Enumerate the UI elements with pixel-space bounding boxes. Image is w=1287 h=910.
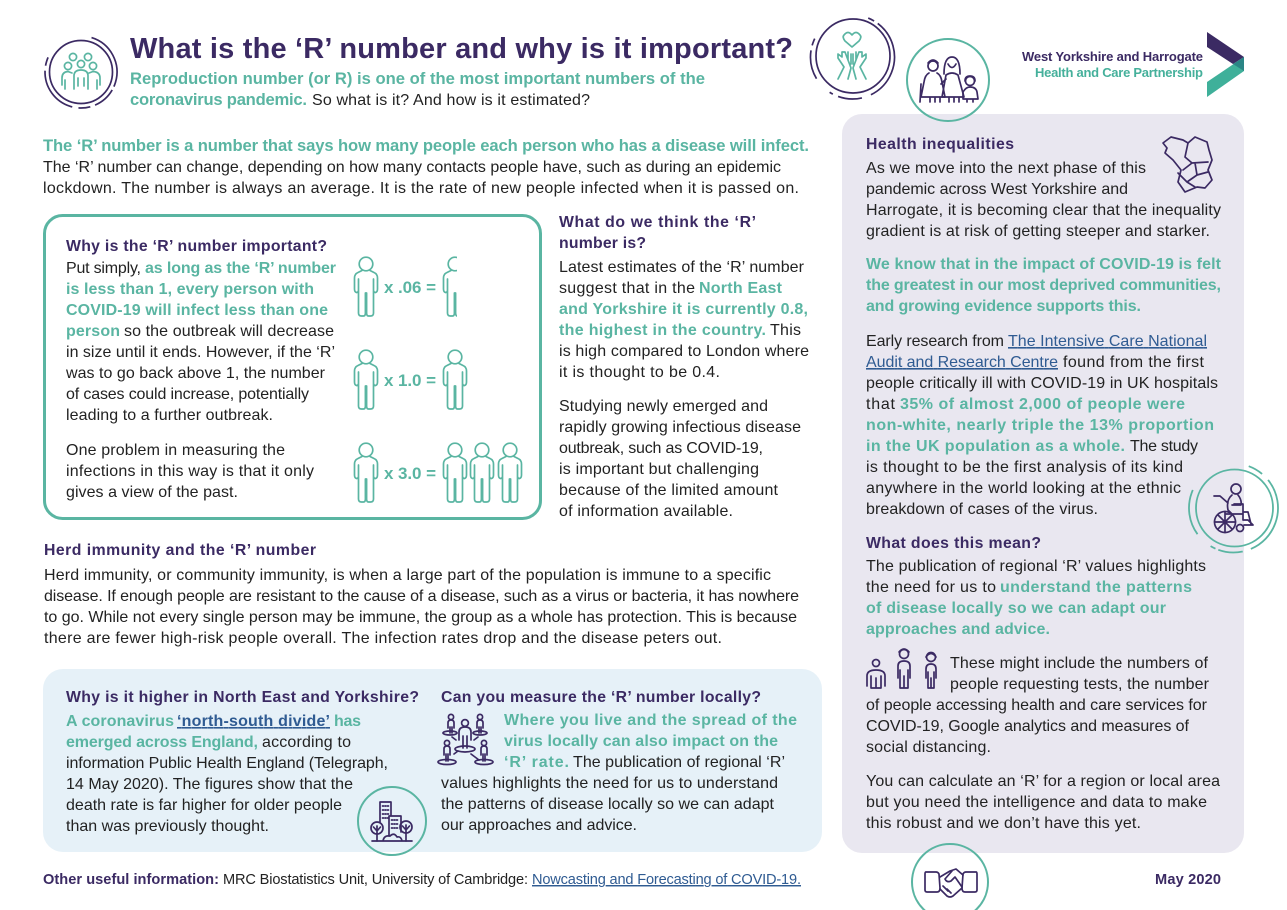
logo: West Yorkshire and Harrogate — [1022, 49, 1203, 64]
diagram: R 1.0 — [354, 350, 466, 409]
panel: health inequalities background — [842, 114, 1244, 853]
text block: can you measure the R number locally: the patterns of disease locally so we can adapt — [441, 796, 775, 813]
text block: why is it higher in north east and yorkshire: information Public Health England (Telegraph, — [66, 755, 388, 772]
text block: can you measure the R number locally: Can you measure the ‘R’ number locally? — [441, 689, 761, 706]
text block: herd immunity: Herd immunity and the ‘R’ number — [44, 542, 316, 559]
text block: what do we think the R number is: suggest that in the — [559, 280, 695, 297]
text block: why is it higher in north east and yorkshire: Why is it higher in North East and Yorkshire? — [66, 689, 419, 706]
text: measuring problem: One problem in measuring the — [66, 442, 285, 459]
intro text — [43, 136, 809, 197]
intro text: The ‘R’ number is a number that says how many people each person who has a disease will infect. — [43, 136, 809, 155]
text block: what do we think the R number is: North East — [699, 280, 783, 297]
intro text: The ‘R’ number can change, depending on how many contacts people have, such as during an epidemic — [43, 159, 781, 176]
text: measuring problem: infections in this way is that it only — [66, 463, 314, 480]
icon: wheelchair user in double ring — [1176, 451, 1287, 565]
icon: city in teal circle — [358, 787, 426, 855]
diagram: R 1.0: x 1.0 = — [384, 371, 436, 390]
text block: can you measure the R number locally: values highlights the need for us to understand — [441, 775, 778, 792]
text block: what do we think the R number is: is high compared to London where — [559, 343, 809, 360]
text block: why is it higher in north east and yorkshire: 14 May 2020). The figures show that the — [66, 776, 353, 793]
diagram: R 0.06 — [354, 257, 466, 316]
icon: people spread on network — [438, 714, 493, 764]
text block: can you measure the R number locally: ‘R’ rate. — [504, 754, 569, 771]
callout: deprived communities: We know that in the impact of COVID-19 is felt — [866, 256, 1222, 273]
diagram: R 3.0: x 3.0 = — [384, 464, 436, 483]
text block: what does this mean: The publication of regional ‘R’ values highlights — [866, 558, 1206, 575]
diagram: R 3.0 — [354, 443, 522, 502]
text block: why is it higher in north east and yorkshire: emerged across England, — [66, 734, 258, 751]
text: explanation: as long as the ‘R’ number — [145, 260, 336, 277]
text block: these might include: people requesting tests, the number — [950, 676, 1210, 693]
text block: calculate an R: this robust and we don’t have this yet. — [866, 815, 1141, 832]
footer: useful information: Other useful information: — [43, 872, 219, 888]
heading: why important: Why is the ‘R’ number important? — [66, 238, 327, 255]
icon: three people — [867, 649, 936, 688]
text: explanation: COVID-19 will infect less than one — [66, 302, 328, 319]
text: explanation — [65, 260, 336, 424]
text block: can you measure the R number locally: Where you live and the spread of the — [504, 712, 797, 729]
icon: map of west yorkshire and harrogate — [1163, 137, 1212, 192]
text block: early research: breakdown of cases of the virus. — [866, 501, 1098, 518]
footer: useful information — [43, 872, 801, 888]
text block: what does this mean: the need for us to — [866, 579, 996, 596]
text: measuring problem: gives a view of the past. — [66, 484, 238, 501]
text block: herd immunity: disease. If enough people are resistant to the cause of a disease, such as a virus or bacteria, it has nowhere — [44, 588, 799, 605]
text block: health inequalities: pandemic across West Yorkshire and — [866, 181, 1128, 198]
footer: useful information: Nowcasting and Forecasting of COVID-19. — [532, 872, 801, 888]
text block: these might include: These might include the numbers of — [950, 655, 1209, 672]
text block: what do we think the R number is: This — [770, 322, 801, 339]
text: explanation: is less than 1, every person with — [66, 281, 314, 298]
logo: Health and Care Partnership — [1035, 65, 1203, 80]
icon: hands holding heart in double ring — [798, 2, 907, 112]
text block: what do we think the R number is: it is thought to be 0.4. — [559, 364, 720, 381]
text: explanation: so the outbreak will decrease — [124, 323, 334, 340]
title: What is the ‘R’ number and why is it important? — [130, 33, 793, 65]
text block: what does this mean: What does this mean? — [866, 535, 1041, 552]
text block: why is it higher in north east and yorkshire: A coronavirus — [66, 713, 174, 730]
text block: calculate an R: but you need the intelligence and data to make — [866, 794, 1207, 811]
text block: what do we think the R number is: What do we think the ‘R’ — [559, 214, 756, 231]
text block: early research: The study — [1130, 438, 1198, 455]
text block: early research: Early research from — [866, 333, 1004, 350]
text block: these might include — [866, 655, 1210, 756]
callout: deprived communities: and growing evidence supports this. — [866, 298, 1141, 315]
text block: what do we think the R number is — [559, 214, 809, 381]
text block: studying outbreaks: Studying newly emerged and — [559, 398, 768, 415]
text block: what do we think the R number is: the highest in the country. — [559, 322, 766, 339]
text block: health inequalities — [866, 136, 1221, 240]
text block: studying outbreaks — [559, 398, 801, 520]
icon: handshake in teal circle — [912, 844, 988, 910]
text: explanation: person — [66, 323, 120, 340]
text block: early research: found from the first — [1063, 354, 1205, 371]
panel: north east and local measure background — [43, 669, 822, 852]
text block: early research: 35% of almost 2,000 of people were — [900, 396, 1185, 413]
text block: what do we think the R number is: number is? — [559, 235, 646, 252]
text block: studying outbreaks: outbreak, such as COVID-19, — [559, 440, 763, 457]
text block: why is it higher in north east and yorkshire: according to — [262, 734, 351, 751]
text block: early research: is thought to be the first analysis of its kind — [866, 459, 1183, 476]
text block: early research: people critically ill with COVID-19 in UK hospitals — [866, 375, 1218, 392]
text block: early research: The Intensive Care National — [1008, 333, 1207, 350]
text block: can you measure the R number locally — [441, 689, 797, 834]
text block: health inequalities: Harrogate, it is becoming clear that the inequality — [866, 202, 1221, 219]
text block: these might include: COVID-19, Google analytics and measures of — [866, 718, 1190, 735]
subtitle: Reproduction number (or R) is one of the most important numbers of the — [130, 69, 705, 88]
text: explanation: of cases could increase, potentially — [66, 386, 309, 403]
footer: date: May 2020 — [1155, 872, 1221, 888]
text block: studying outbreaks: because of the limited amount — [559, 482, 779, 499]
diagram: R 0.06: x .06 = — [384, 278, 436, 297]
text block: why is it higher in north east and yorkshire: death rate is far higher for older people — [66, 797, 342, 814]
icon: family in teal circle — [907, 39, 989, 121]
text block: herd immunity: to go. While not every single person may be immune, the group as a whole has protection. This is because — [44, 609, 797, 626]
text block: studying outbreaks: rapidly growing infectious disease — [559, 419, 801, 436]
text block: what does this mean: of disease locally so we can adapt our — [866, 600, 1166, 617]
text block: herd immunity: there are fewer high-risk people overall. The infection rates drop and the disease peters out. — [44, 630, 722, 647]
text block: what do we think the R number is: Latest estimates of the ‘R’ number — [559, 259, 805, 276]
text block: why is it higher in north east and yorkshire — [66, 689, 419, 835]
text: explanation: was to go back above 1, the number — [65, 365, 326, 382]
text: explanation: in size until it ends. However, if the ‘R’ — [66, 344, 335, 361]
text block: studying outbreaks: of information available. — [559, 503, 733, 520]
subtitle — [130, 69, 705, 109]
text block: why is it higher in north east and yorkshire: than was previously thought. — [66, 818, 269, 835]
text block: herd immunity: Herd immunity, or community immunity, is when a large part of the population is immune to a specific — [44, 567, 771, 584]
logo — [1022, 32, 1244, 97]
panel: why is the R number important — [44, 216, 540, 518]
text block: what does this mean: understand the patterns — [1000, 579, 1192, 596]
text block: these might include: social distancing. — [866, 739, 991, 756]
text block: early research: non-white, nearly triple the 13% proportion — [866, 417, 1214, 434]
text block: calculate an R: You can calculate an ‘R’ for a region or local area — [866, 773, 1220, 790]
text block: calculate an R — [866, 773, 1220, 832]
text block: early research: Audit and Research Centre — [866, 354, 1058, 371]
text block: early research: that — [866, 396, 896, 413]
text block: early research: anywhere in the world looking at the ethnic — [866, 480, 1181, 497]
text block: why is it higher in north east and yorkshire: has — [334, 713, 361, 730]
text block: what do we think the R number is: and Yorkshire it is currently 0.8, — [559, 301, 808, 318]
subtitle: So what is it? And how is it estimated? — [312, 92, 590, 109]
text block: why is it higher in north east and yorkshire: ‘north-south divide’ — [177, 713, 330, 730]
text: measuring problem — [66, 442, 314, 501]
text: explanation: Put simply, — [66, 260, 141, 277]
text block: health inequalities: gradient is at risk of getting steeper and starker. — [866, 223, 1210, 240]
text block: early research — [866, 333, 1218, 518]
text block: health inequalities: Health inequalities — [866, 136, 1014, 153]
text: explanation: leading to a further outbreak. — [66, 407, 273, 424]
text block: what does this mean: approaches and advice. — [866, 621, 1050, 638]
text block: studying outbreaks: is important but challenging — [559, 461, 759, 478]
text block: what does this mean — [866, 535, 1206, 638]
callout: deprived communities: the greatest in our most deprived communities, — [866, 277, 1221, 294]
text block: can you measure the R number locally: The publication of regional ‘R’ — [573, 754, 785, 771]
text block: early research: in the UK population as a whole. — [866, 438, 1125, 455]
intro text: lockdown. The number is always an average. It is the rate of new people infected when it is passed on. — [43, 180, 799, 197]
text block: these might include: of people accessing health and care services for — [866, 697, 1208, 714]
text block: herd immunity — [44, 542, 799, 647]
text block: health inequalities: As we move into the next phase of this — [866, 160, 1146, 177]
text block: can you measure the R number locally: our approaches and advice. — [441, 817, 637, 834]
footer: useful information: MRC Biostatistics Unit, University of Cambridge: — [223, 872, 528, 888]
callout: deprived communities — [866, 256, 1222, 315]
subtitle: coronavirus pandemic. — [130, 90, 307, 109]
text block: can you measure the R number locally: virus locally can also impact on the — [504, 733, 778, 750]
icon: group of people in double ring — [36, 27, 126, 117]
